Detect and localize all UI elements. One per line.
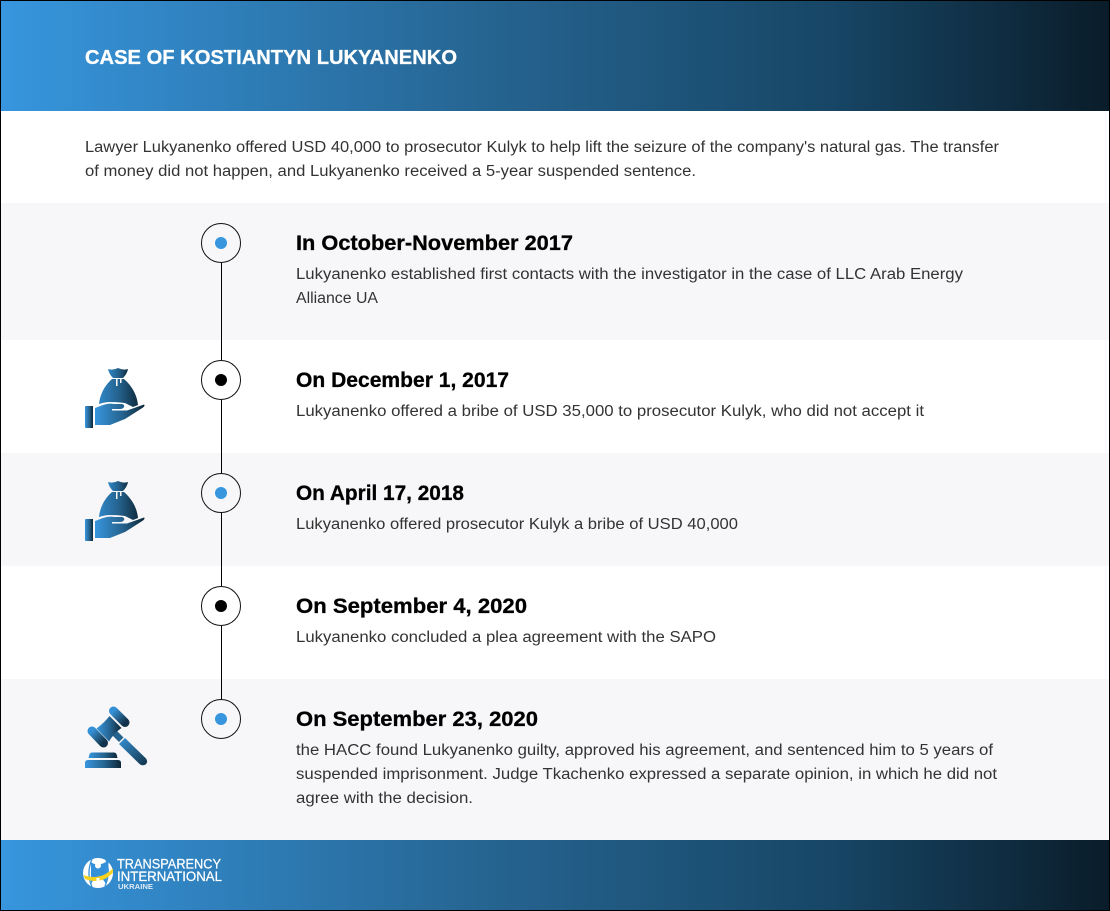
text block: introduction — [85, 139, 999, 180]
event: September 4 2020: Lukyanenko concluded a plea agreement with the SAPO — [296, 629, 716, 646]
event: December 1 2017: On December 1, 2017 — [296, 369, 509, 392]
timeline marker: April 17 2018 — [202, 474, 240, 512]
event: September 23 2020: the HACC found Lukyanenko guilty, approved his agreement, and sentenced him to 5 years of — [296, 742, 994, 759]
timeline connector — [221, 243, 222, 700]
event: September 23 2020 — [296, 708, 998, 807]
event: September 4 2020 — [296, 595, 716, 646]
timeline marker: October-November 2017 — [202, 224, 240, 262]
logo: Transparency International Ukraine: TRANSPARENCY — [117, 856, 221, 872]
timeline marker: September 4 2020 — [202, 586, 240, 626]
event: September 4 2020: On September 4, 2020 — [296, 595, 527, 618]
text block: introduction: Lawyer Lukyanenko offered USD 40,000 to prosecutor Kulyk to help lift the seizure of the company's natural gas. The transfer — [85, 139, 999, 156]
logo: Transparency International Ukraine: INTERNATIONAL — [117, 869, 222, 884]
logo: Transparency International Ukraine: UKRAINE — [118, 884, 153, 891]
event: September 23 2020: agree with the decision. — [296, 790, 473, 807]
panel: header band — [0, 0, 1110, 111]
logo: Transparency International Ukraine — [83, 856, 222, 891]
panel: September 23 2020 row — [0, 679, 1110, 840]
event: April 17 2018 — [296, 482, 738, 533]
event: April 17 2018: Lukyanenko offered prosecutor Kulyk a bribe of USD 40,000 — [296, 516, 738, 533]
event: December 1 2017 — [296, 369, 925, 420]
event: December 1 2017: Lukyanenko offered a bribe of USD 35,000 to prosecutor Kulyk, who did not accept it — [296, 403, 925, 420]
event: October-November 2017 — [296, 232, 963, 307]
icon: judge gavel — [85, 711, 147, 768]
event: September 23 2020: On September 23, 2020 — [296, 708, 538, 731]
event: April 17 2018: On April 17, 2018 — [296, 482, 464, 505]
icon: money bag in hand — [85, 481, 145, 541]
event: October-November 2017: In October-November 2017 — [296, 232, 573, 255]
text block: introduction: of money did not happen, and Lukyanenko received a 5-year suspended sentence. — [85, 163, 696, 180]
event: October-November 2017: Alliance UA — [296, 290, 379, 307]
title: CASE OF KOSTIANTYN LUKYANENKO — [85, 47, 457, 69]
timeline marker: September 23 2020 — [202, 700, 240, 738]
panel: April 17 2018 row — [0, 453, 1110, 566]
icon: money bag in hand — [85, 368, 145, 428]
timeline marker: December 1 2017 — [202, 360, 240, 400]
panel: October-November 2017 row — [0, 203, 1110, 340]
event: October-November 2017: Lukyanenko established first contacts with the investigator in the case of LLC Arab Energy — [296, 266, 963, 283]
event: September 23 2020: suspended imprisonment. Judge Tkachenko expressed a separate opinion, in which he did not — [296, 766, 998, 783]
panel: footer band — [0, 840, 1110, 911]
